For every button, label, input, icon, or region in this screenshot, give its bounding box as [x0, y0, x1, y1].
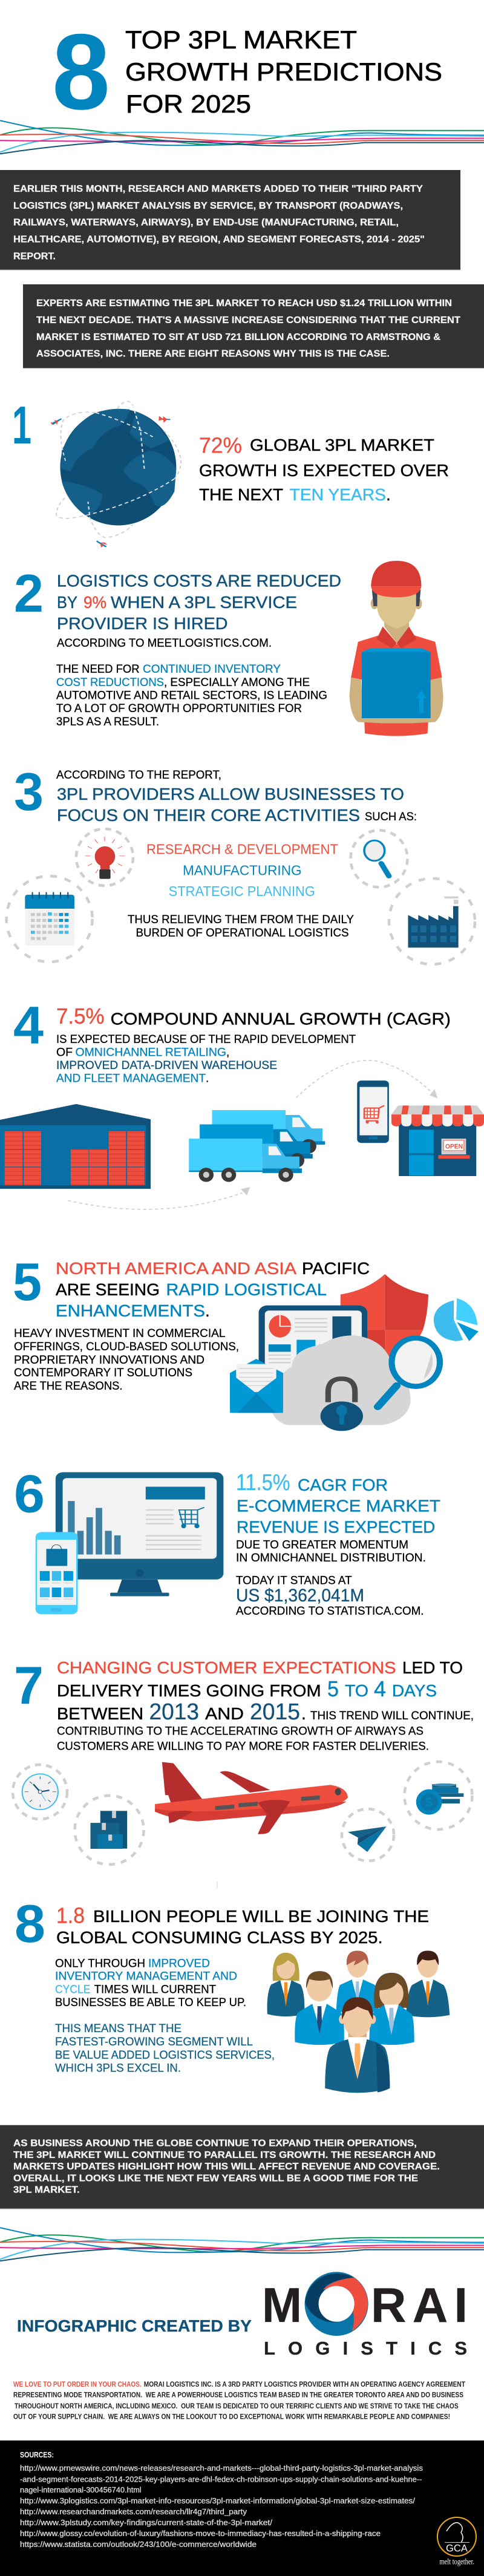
section 2 heading: WHEN A 3PL SERVICE	[111, 593, 297, 612]
core activities list: RESEARCH & DEVELOPMENT	[146, 841, 338, 857]
person: front man	[325, 1997, 390, 2093]
section 4 text: 7.5%	[56, 1004, 104, 1028]
icon: clock	[22, 1774, 58, 1809]
logo ring	[305, 2272, 368, 2336]
section 7 text: BETWEEN	[57, 1704, 143, 1723]
person: back right man	[406, 1950, 450, 2017]
section 8 paragraph	[55, 1957, 275, 2075]
section 1 text: GROWTH IS EXPECTED OVER	[199, 461, 449, 480]
section 4 text: OMNICHANNEL RETAILING	[75, 1047, 226, 1059]
section 8 heading	[56, 1903, 429, 1947]
section 8 heading: 1.8	[56, 1903, 85, 1927]
closing panel text: AS BUSINESS AROUND THE GLOBE CONTINUE TO EXPAND THEIR OPERATIONS,	[13, 2138, 417, 2149]
section 1 text	[199, 433, 449, 504]
section 4 text: ,	[226, 1047, 229, 1059]
sources list: nagel-international-300456740.html	[20, 2486, 142, 2494]
section 1 text: THE NEXT	[199, 485, 283, 504]
title text: FOR 2025	[126, 90, 251, 118]
section 8 paragraph: INVENTORY MANAGEMENT AND	[55, 1970, 237, 1983]
section 2 paragraph: 3PLS AS A RESULT.	[56, 716, 159, 728]
tablet dashboard	[259, 1306, 367, 1382]
sources list: http://www.researchandmarkets.com/research/llr4g7/third_party	[20, 2508, 247, 2516]
closing panel text: OVERALL, IT LOOKS LIKE THE NEXT FEW YEARS WILL BE A GOOD TIME FOR THE	[13, 2173, 418, 2183]
icon: calendar	[25, 892, 74, 946]
section 7 text: CUSTOMERS ARE WILLING TO PAY MORE FOR FASTER DELIVERIES.	[57, 1741, 429, 1753]
closing panel	[0, 2125, 484, 2209]
section 4 text: .	[206, 1073, 209, 1085]
section 8 heading: BILLION PEOPLE WILL BE JOINING THE	[93, 1907, 429, 1926]
section 5 paragraph: HEAVY INVESTMENT IN COMMERCIAL	[14, 1327, 225, 1340]
section 1 text: 72%	[199, 433, 242, 457]
core activities list	[128, 841, 354, 940]
section 6 text: US $1,362,041M	[236, 1586, 364, 1606]
icon: delivery man holding a box	[350, 561, 443, 736]
section 2 paragraph: CONTINUED INVENTORY	[143, 663, 281, 676]
title text	[125, 25, 442, 118]
monitor and phone illustration	[36, 1473, 223, 1614]
section 2 heading: 9%	[83, 593, 106, 612]
section 7 text: AND	[205, 1704, 244, 1723]
section 6 text: TODAY IT STANDS AT	[236, 1575, 352, 1587]
section 4 text: IMPROVED DATA-DRIVEN WAREHOUSE	[56, 1059, 277, 1072]
section 6 text: DUE TO GREATER MOMENTUM	[236, 1538, 408, 1551]
section 3	[7, 762, 475, 964]
intro panel 2 text: EXPERTS ARE ESTIMATING THE 3PL MARKET TO REACH USD $1.24 TRILLION WITHIN	[36, 298, 452, 309]
section 1	[12, 395, 449, 548]
about paragraph	[13, 2380, 466, 2421]
numeral 8: 8	[15, 1894, 45, 1953]
title	[52, 11, 442, 132]
title text: GROWTH PREDICTIONS	[125, 57, 442, 86]
section 4 text	[56, 1004, 451, 1085]
section 8 heading: GLOBAL CONSUMING CLASS BY 2025.	[56, 1928, 383, 1947]
section 6 text: CAGR FOR	[298, 1476, 388, 1494]
icon: factory	[408, 897, 459, 947]
section 8 paragraph: BE VALUE ADDED LOGISTICS SERVICES,	[55, 2049, 275, 2062]
core activities list: BURDEN OF OPERATIONAL LOGISTICS	[136, 927, 348, 940]
person: middle right woman	[369, 1973, 414, 2045]
icon: globe with flight paths	[51, 401, 181, 548]
core activities list: STRATEGIC PLANNING	[169, 883, 315, 899]
about paragraph: WE LOVE TO PUT ORDER IN YOUR CHAOS.	[13, 2380, 142, 2388]
section 8 paragraph: THIS MEANS THAT THE	[55, 2022, 182, 2035]
bottom coloured route lines	[0, 2228, 484, 2261]
intro panel 1 text: HEALTHCARE, AUTOMOTIVE), BY REGION, AND SEGMENT FORECASTS, 2014 - 2025"	[13, 235, 425, 245]
closing panel text: MARKETS UPDATES HIGHLIGHT HOW THIS WILL AFFECT REVENUE AND COVERAGE.	[13, 2162, 440, 2172]
section 4	[0, 995, 484, 1209]
section 2 heading: ACCORDING TO MEETLOGISTICS.COM.	[57, 637, 272, 650]
section 8 paragraph: FASTEST-GROWING SEGMENT WILL	[55, 2036, 253, 2048]
section 3 heading: FOCUS ON THEIR CORE ACTIVITIES	[57, 806, 360, 825]
section 7 text: .	[301, 1704, 306, 1723]
section 3 heading: SUCH AS:	[365, 811, 417, 823]
dashed circles around icons	[7, 829, 475, 964]
section 1 text: TEN YEARS	[289, 485, 386, 504]
section 2 paragraph: COST REDUCTIONS	[56, 676, 164, 689]
small divider tick	[217, 1881, 218, 1888]
logo wordmark: RAI	[371, 2278, 468, 2333]
section 2 paragraph	[56, 663, 327, 728]
sources list: -and-segment-forecasts-2014-2025-key-players-are-dhl-fedex-ch-robinson-ups-supply-chain-solutions-and-kuehne--	[20, 2475, 422, 2483]
section 7 text	[57, 1658, 474, 1753]
closing panel text	[13, 2138, 440, 2195]
dashed circles around icons	[13, 1762, 472, 1865]
intro panel 2 text	[36, 298, 460, 359]
person: back left woman	[267, 1953, 304, 2016]
credit heading: INFOGRAPHIC CREATED BY	[17, 2316, 252, 2335]
numeral 6: 6	[14, 1464, 45, 1523]
icon: plane	[96, 540, 107, 548]
section 6 text: ACCORDING TO STATISTICA.COM.	[236, 1605, 424, 1618]
section 7 text: DAYS	[392, 1681, 437, 1700]
section 2 heading: PROVIDER IS HIRED	[57, 614, 227, 633]
section 5	[13, 1252, 479, 1431]
section 7 text: LED TO	[402, 1658, 463, 1677]
GCA logo	[437, 2517, 476, 2566]
numeral 2: 2	[14, 563, 44, 623]
intro panel 2 text: MARKET IS ESTIMATED TO SIT AT USD 721 BILLION ACCORDING TO ARMSTRONG &	[36, 332, 440, 342]
section 5 heading: RAPID LOGISTICAL	[166, 1280, 327, 1299]
intro panel 1 text: EARLIER THIS MONTH, RESEARCH AND MARKETS ADDED TO THEIR "THIRD PARTY	[13, 184, 423, 194]
section 6 text: 11.5%	[236, 1470, 290, 1496]
section 8 paragraph: ONLY THROUGH	[55, 1957, 145, 1970]
icon: light bulb	[85, 837, 125, 879]
icon: paper plane	[348, 1826, 387, 1852]
supply chain illustration	[0, 1061, 484, 1209]
section 5 heading	[56, 1259, 370, 1320]
numeral 5: 5	[13, 1252, 42, 1312]
logo wordmark	[262, 2278, 468, 2359]
section 5 paragraph: CONTEMPORARY IT SOLUTIONS	[14, 1367, 192, 1379]
sources panel	[0, 2440, 484, 2576]
intro panel 1 text: RAILWAYS, WATERWAYS, AIRWAYS), BY END-USE (MANUFACTURING, RETAIL,	[13, 218, 399, 227]
section 4 text: AND FLEET MANAGEMENT	[56, 1073, 206, 1085]
section 8 paragraph: CYCLE	[55, 1983, 91, 1996]
section 7	[13, 1655, 474, 1888]
section 7 text: DELIVERY TIMES GOING FROM	[57, 1681, 321, 1700]
intro panel 2 text: THE NEXT DECADE. THAT'S A MASSIVE INCREASE CONSIDERING THAT THE CURRENT	[36, 315, 460, 325]
coin dollar sign: $	[425, 1796, 433, 1809]
pie chart	[434, 1298, 479, 1341]
title text: TOP 3PL MARKET	[125, 25, 357, 54]
sources list: https://www.statista.com/outlook/243/100/e-commerce/worldwide	[20, 2540, 257, 2549]
section 5 paragraph	[14, 1327, 239, 1393]
section 8 paragraph: IMPROVED	[148, 1957, 210, 1970]
section 8 paragraph: WHICH 3PLS EXCEL IN.	[55, 2062, 181, 2075]
dotted arrow: trucks to store	[296, 1061, 437, 1099]
numeral 4: 4	[13, 995, 44, 1055]
section 5 paragraph: OFFERINGS, CLOUD-BASED SOLUTIONS,	[14, 1341, 239, 1353]
person: back centre man	[336, 1950, 379, 2012]
desktop monitor with charts	[56, 1473, 223, 1596]
section 4 text: OF	[56, 1047, 73, 1059]
big numeral 8: 8	[52, 11, 110, 132]
section 7 text: 2015	[250, 1699, 300, 1725]
sources list: http://www.3plogistics.com/3pl-market-info-resources/3pl-market-information/global-3pl-market-size-estimates/	[20, 2497, 416, 2505]
closing panel text: THE 3PL MARKET WILL CONTINUE TO PARALLEL ITS GROWTH. THE RESEARCH AND	[13, 2150, 436, 2160]
Morai Logistics logo	[262, 2272, 468, 2359]
airways illustration	[22, 1762, 463, 1852]
section 7 text: THIS TREND WILL CONTINUE,	[310, 1710, 474, 1722]
section 7 text: 5	[327, 1676, 339, 1701]
person: middle left man	[295, 1971, 344, 2045]
icon: coins	[416, 1783, 463, 1815]
section 2 paragraph: , ESPECIALLY AMONG THE	[164, 676, 310, 689]
section 6 text: E-COMMERCE MARKET	[237, 1497, 440, 1515]
core activities list: THUS RELIEVING THEM FROM THE DAILY	[128, 914, 354, 926]
icon: red airplane	[155, 1762, 348, 1834]
section 7 text: CHANGING CUSTOMER EXPECTATIONS	[57, 1658, 396, 1677]
section 2 heading: LOGISTICS COSTS ARE REDUCED	[57, 571, 341, 590]
smartphone with shop	[36, 1532, 78, 1614]
sources list	[20, 2464, 423, 2549]
icon: plane	[51, 418, 62, 425]
section 7 text: 2013	[149, 1699, 199, 1725]
business people group	[267, 1950, 450, 2093]
section 2 heading: BY	[57, 593, 77, 612]
section 2 paragraph: TO A LOT OF GROWTH OPPORTUNITIES FOR	[56, 702, 302, 715]
section 6 text: IN OMNICHANNEL DISTRIBUTION.	[236, 1552, 426, 1564]
section 7 text: 4	[374, 1676, 386, 1701]
section 8 paragraph: BUSINESSES BE ABLE TO KEEP UP.	[55, 1996, 246, 2009]
smartphone with cart	[357, 1080, 389, 1143]
section 7 text: CONTRIBUTING TO THE ACCELERATING GROWTH OF AIRWAYS AS	[57, 1725, 424, 1737]
intro panel 2 text: ASSOCIATES, INC. THERE ARE EIGHT REASONS WHY THIS IS THE CASE.	[36, 348, 390, 359]
logo wordmark: LOGISTICS	[264, 2338, 467, 2359]
logo wordmark: M	[262, 2278, 302, 2333]
magnifier	[378, 1338, 440, 1407]
intro panel 1	[0, 170, 460, 270]
open sign text: OPEN	[445, 1143, 463, 1151]
sources list: http://www.3plstudy.com/key-findings/current-state-of-the-3pl-market/	[20, 2519, 273, 2527]
icons: bulb, magnifier, calendar, factory	[25, 837, 459, 947]
section 1 text: .	[386, 485, 391, 504]
section 8 paragraph: TIMES WILL CURRENT	[94, 1983, 216, 1996]
intro panel 1 text: REPORT.	[13, 252, 56, 262]
intro panel 1 text: LOGISTICS (3PL) MARKET ANALYSIS BY SERVICE, BY TRANSPORT (ROADWAYS,	[13, 201, 403, 211]
storefront with open sign	[391, 1105, 484, 1176]
section 7 text: TO	[345, 1681, 368, 1700]
dotted arrow: warehouse to trucks	[68, 1187, 250, 1209]
icon: magnifier	[364, 840, 389, 876]
cloud	[271, 1335, 411, 1425]
intro panel 2	[23, 284, 484, 368]
section 1 text: GLOBAL 3PL MARKET	[250, 436, 434, 454]
icon: stacked boxes	[90, 1811, 127, 1849]
icon: plane	[159, 418, 171, 420]
sources list: http://www.glossy.co/evolution-of-luxury/fashions-move-to-immediacy-has-resulted-in-a-shipping-race	[20, 2529, 381, 2538]
numeral 1: 1	[12, 395, 31, 455]
section 3 heading: ACCORDING TO THE REPORT,	[56, 769, 221, 782]
numeral 3: 3	[14, 762, 44, 822]
numeral 7: 7	[14, 1655, 44, 1716]
GCA logo: GCA	[446, 2543, 468, 2554]
cloud security illustration	[230, 1274, 479, 1431]
delivery trucks	[189, 1110, 325, 1182]
section 2 paragraph: AUTOMOTIVE AND RETAIL SECTORS, IS LEADING	[56, 690, 327, 702]
section 6 text: REVENUE IS EXPECTED	[237, 1518, 435, 1537]
section 6 text	[236, 1470, 440, 1618]
section 5 paragraph: ARE THE REASONS.	[14, 1380, 122, 1393]
warehouse	[0, 1104, 151, 1189]
core activities list: MANUFACTURING	[183, 862, 301, 878]
section 3 heading	[56, 769, 417, 825]
section 2 heading	[57, 571, 341, 650]
section 2 paragraph: THE NEED FOR	[56, 663, 140, 676]
intro panel 1 text	[13, 184, 425, 262]
section 8	[15, 1894, 450, 2093]
section 6	[14, 1464, 440, 1618]
section 5 heading: ENHANCEMENTS	[56, 1301, 205, 1320]
section 4 text: IS EXPECTED BECAUSE OF THE RAPID DEVELOPMENT	[56, 1033, 356, 1046]
section 5 heading: NORTH AMERICA AND ASIA	[56, 1259, 296, 1278]
section 3 heading: 3PL PROVIDERS ALLOW BUSINESSES TO	[57, 785, 404, 803]
section 2	[14, 561, 443, 736]
shield	[341, 1274, 428, 1367]
section 5 heading: ARE SEEING	[56, 1280, 160, 1299]
sources heading: SOURCES:	[20, 2450, 54, 2459]
top coloured route lines	[0, 120, 484, 154]
closing panel text: 3PL MARKET.	[13, 2185, 80, 2195]
sources list: http://www.prnewswire.com/news-releases/research-and-markets---global-third-party-logistics-3pl-market-analysis	[20, 2464, 423, 2473]
section 4 text: COMPOUND ANNUAL GROWTH (CAGR)	[111, 1009, 451, 1028]
section 5 heading: .	[205, 1301, 210, 1320]
padlock	[321, 1379, 363, 1431]
section 5 heading: PACIFIC	[302, 1259, 370, 1278]
envelope	[230, 1359, 283, 1413]
section 5 paragraph: PROPRIETARY INNOVATIONS AND	[14, 1354, 204, 1367]
